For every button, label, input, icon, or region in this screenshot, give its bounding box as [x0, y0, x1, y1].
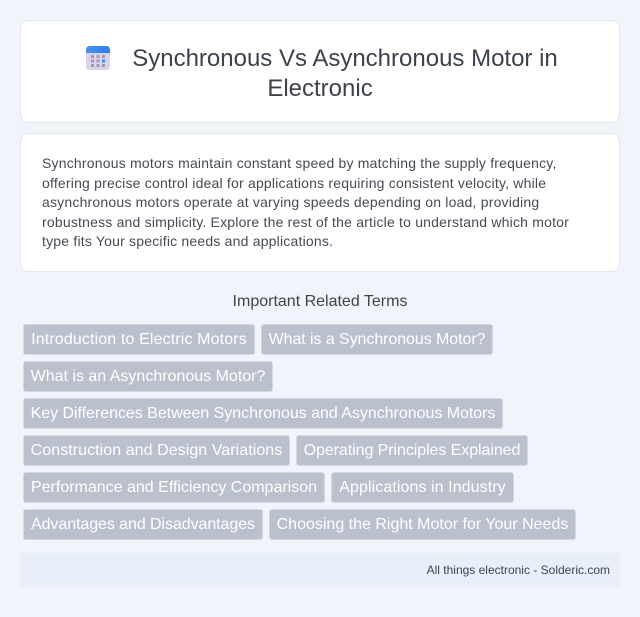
chip: Performance and Efficiency Comparison	[31, 479, 317, 496]
chip	[261, 324, 493, 355]
chip	[23, 509, 263, 540]
chip: Key Differences Between Synchronous and Asynchronous Motors	[31, 405, 495, 422]
footer text: All things electronic - Solderic.com	[427, 563, 610, 577]
chip: Operating Principles Explained	[304, 442, 520, 459]
chip: What is a Synchronous Motor?	[269, 331, 485, 348]
chip	[331, 472, 514, 503]
summary text	[42, 155, 569, 249]
summary text: robustness and simplicity. Explore the rest of the article to understand which motor	[42, 214, 569, 230]
panel: summary card	[20, 133, 620, 272]
chip: Applications in Industry	[339, 479, 506, 496]
chip	[23, 361, 273, 392]
summary text: asynchronous motors operate at varying speeds depending on load, providing	[42, 194, 539, 210]
summary text: type fits Your specific needs and applications.	[42, 233, 333, 249]
chip: Construction and Design Variations	[31, 442, 282, 459]
chip	[23, 472, 325, 503]
chip: Advantages and Disadvantages	[31, 516, 255, 533]
heading: important related terms: Important Related Terms	[233, 293, 407, 310]
title	[132, 45, 558, 102]
chip: What is an Asynchronous Motor?	[31, 368, 265, 385]
footer bar	[20, 553, 620, 587]
title: Synchronous Vs Asynchronous Motor in	[132, 45, 558, 72]
panel: related term chips	[23, 324, 576, 540]
chip	[269, 509, 576, 540]
panel: title card	[20, 20, 620, 123]
chip: Introduction to Electric Motors	[31, 331, 247, 348]
chip	[23, 324, 255, 355]
icon: calendar grid	[86, 46, 110, 70]
chip: Choosing the Right Motor for Your Needs	[277, 516, 568, 533]
title: Electronic	[267, 75, 373, 102]
chip	[23, 398, 503, 429]
summary text: Synchronous motors maintain constant speed by matching the supply frequency,	[42, 155, 557, 171]
chip	[296, 435, 528, 466]
chip	[23, 435, 290, 466]
summary text: offering precise control ideal for applications requiring consistent velocity, while	[42, 175, 546, 191]
